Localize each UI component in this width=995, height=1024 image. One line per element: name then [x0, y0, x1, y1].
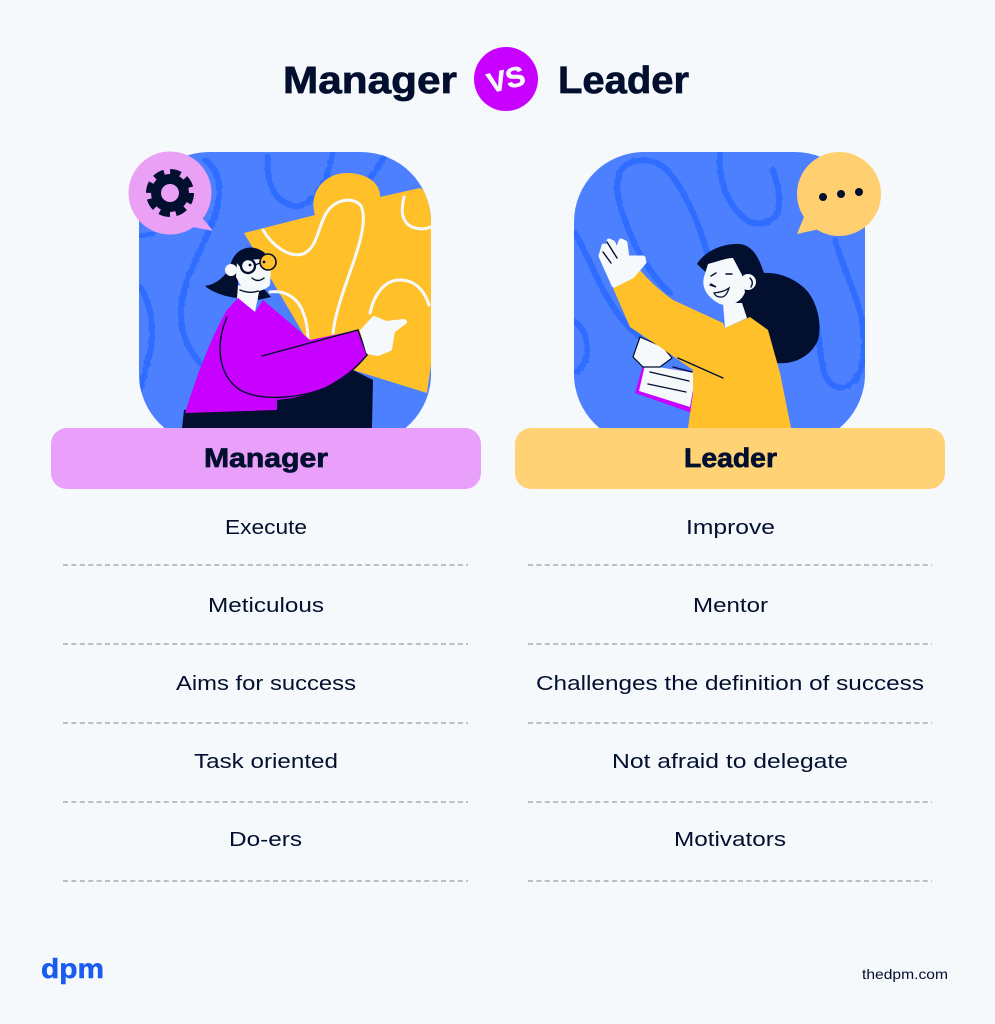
- manager traits: Do-ers: [229, 829, 302, 851]
- manager traits: Task oriented: [194, 751, 338, 773]
- leader heading: Leader: [684, 443, 778, 473]
- icon: gear: [149, 172, 191, 214]
- footer url: thedpm.com: [862, 966, 948, 982]
- manager traits: Meticulous: [208, 595, 324, 617]
- manager heading: [51, 428, 481, 489]
- puzzle piece: [244, 173, 440, 393]
- leader traits: [528, 517, 932, 881]
- leader traits: Challenges the definition of success: [536, 673, 924, 695]
- blue panel with scribbles: [574, 152, 865, 444]
- manager heading: Manager: [204, 443, 329, 473]
- leader traits: Improve: [686, 517, 775, 539]
- panel: manager column: [51, 428, 481, 881]
- logo: dpm: dpm: [41, 953, 104, 984]
- vs badge: VS: [484, 60, 528, 99]
- leader figure: [601, 241, 820, 428]
- manager traits: Execute: [225, 517, 307, 539]
- panel: leader column: [515, 428, 945, 881]
- speech bubble: gear: [128, 152, 213, 234]
- title: Manager: [283, 60, 457, 102]
- title: [283, 47, 689, 111]
- illustration: manager: [128, 152, 440, 444]
- manager traits: [63, 517, 468, 881]
- speech bubble: dots: [797, 152, 881, 236]
- blue panel with scribbles: [139, 152, 440, 444]
- vs badge: [474, 47, 538, 111]
- manager traits: Aims for success: [176, 673, 356, 695]
- illustration: leader: [574, 152, 881, 444]
- title: Leader: [558, 60, 689, 102]
- leader traits: Motivators: [674, 829, 786, 851]
- leader heading: [515, 428, 945, 489]
- manager figure: [182, 248, 405, 428]
- leader traits: Not afraid to delegate: [612, 751, 848, 773]
- leader traits: Mentor: [693, 595, 768, 617]
- book: [635, 365, 698, 413]
